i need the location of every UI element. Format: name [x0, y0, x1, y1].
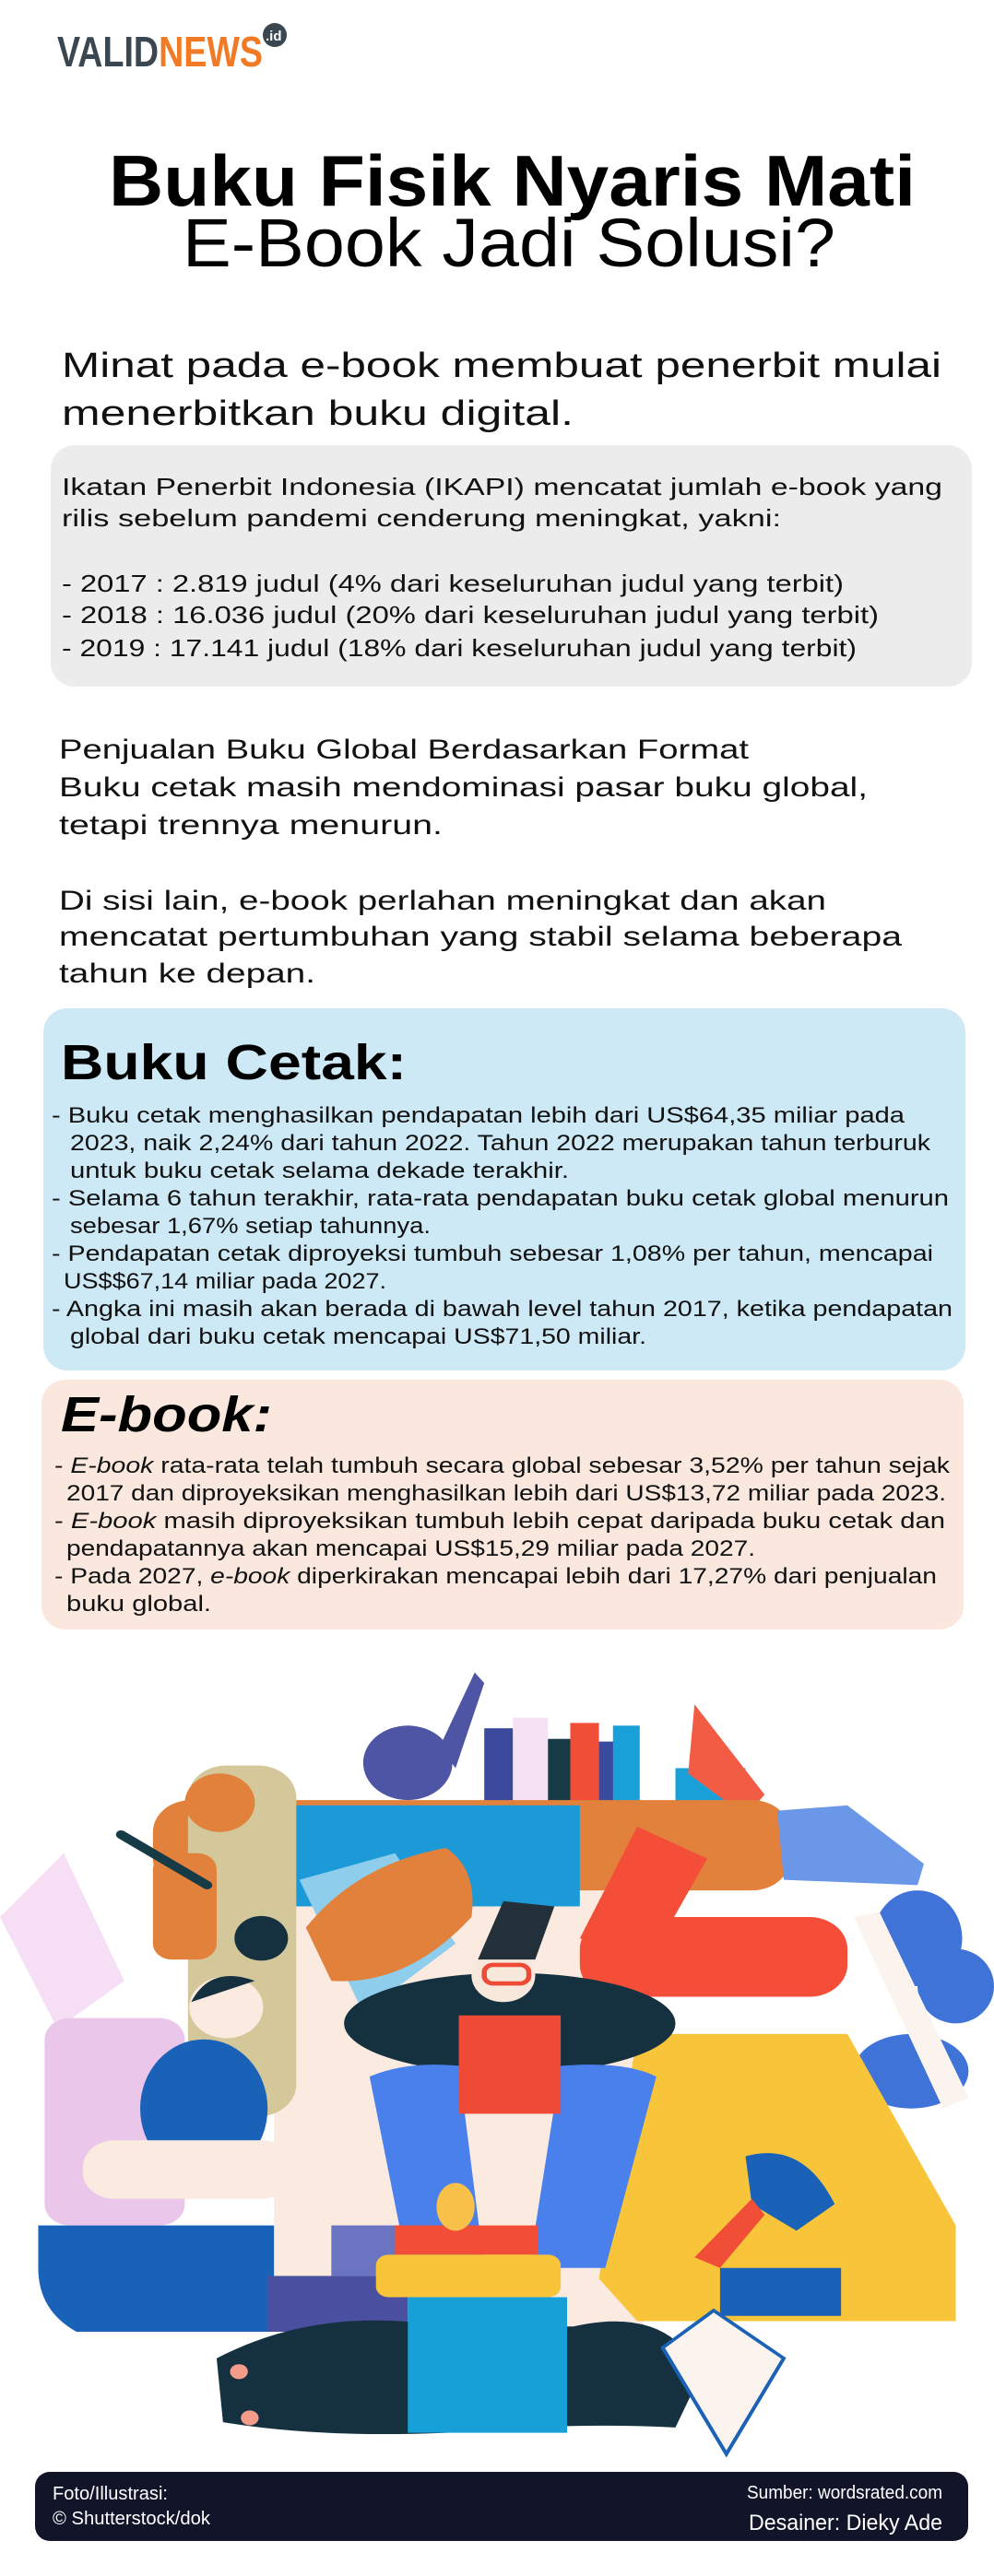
panel: Buku Cetak: - Selama 6 tahun terakhir, rata-rata pendapatan buku cetak global menurun [52, 1186, 949, 1211]
title [109, 140, 916, 281]
panel: Buku Cetak: untuk buku cetak selama dekade terakhir. [70, 1159, 569, 1183]
panel: Buku Cetak: sebesar 1,67% setiap tahunnya. [70, 1214, 431, 1239]
text block: global sales: Penjualan Buku Global Berdasarkan Format [59, 735, 750, 765]
panel: E-book: - Pada 2027, e-book diperkirakan mencapai lebih dari 17,27% dari penjualan [54, 1564, 937, 1589]
panel: Buku Cetak: - Buku cetak menghasilkan pendapatan lebih dari US$64,35 miliar pada [52, 1103, 905, 1128]
footer [35, 2472, 968, 2541]
panel: IKAPI data: - 2019 : 17.141 judul (18% dari keseluruhan judul yang terbit) [62, 634, 857, 662]
subtitle: Minat pada e-book membuat penerbit mulai [62, 347, 941, 385]
subtitle [62, 347, 941, 433]
panel: E-book: - E-book masih diproyeksikan tumbuh lebih cepat daripada buku cetak dan [54, 1509, 945, 1534]
panel: Buku Cetak: global dari buku cetak mencapai US$71,50 miliar. [70, 1324, 646, 1349]
text block: global sales: Di sisi lain, e-book perlahan meningkat dan akan [59, 886, 826, 916]
panel: IKAPI data: - 2017 : 2.819 judul (4% dari keseluruhan judul yang terbit) [62, 570, 844, 597]
text block: global sales: tetapi trennya menurun. [59, 810, 443, 841]
text block: global sales: Buku cetak masih mendominasi pasar buku global, [59, 772, 868, 803]
title: Buku Fisik Nyaris Mati [109, 140, 916, 221]
footer: Foto/Illustrasi: [53, 2484, 168, 2504]
panel: E-book: - E-book rata-rata telah tumbuh secara global sebesar 3,52% per tahun sejak [54, 1453, 951, 1478]
panel: Buku Cetak: US$$67,14 miliar pada 2027. [64, 1269, 386, 1294]
panel: IKAPI data: - 2018 : 16.036 judul (20% dari keseluruhan judul yang terbit) [62, 601, 879, 629]
logo: VALIDNEWS [57, 28, 263, 76]
subtitle: menerbitkan buku digital. [62, 394, 574, 433]
panel: Buku Cetak: - Pendapatan cetak diproyeksi tumbuh sebesar 1,08% per tahun, mencapai [52, 1241, 933, 1266]
standing books [484, 1718, 640, 1814]
footer: Sumber: wordsrated.com [747, 2483, 942, 2503]
illustration: people reading [0, 1672, 994, 2457]
logo: .id [266, 29, 282, 44]
panel: E-book: 2017 dan diproyeksikan menghasilkan lebih dari US$13,72 miliar pada 2023. [66, 1481, 946, 1506]
panel: IKAPI data [51, 445, 972, 687]
heading: Buku Cetak: Buku Cetak: [61, 1035, 407, 1090]
text block: global sales: mencatat pertumbuhan yang stabil selama beberapa [59, 922, 902, 952]
panel: E-book [41, 1380, 964, 1629]
title: E-Book Jadi Solusi? [183, 205, 835, 281]
text block: global sales: tahun ke depan. [59, 959, 315, 989]
heading: E-book: E-book: [61, 1387, 272, 1442]
panel: Buku Cetak: - Angka ini masih akan berada di bawah level tahun 2017, ketika pendapatan [52, 1297, 953, 1322]
panel: Buku Cetak: 2023, naik 2,24% dari tahun 2022. Tahun 2022 merupakan tahun terburuk [70, 1131, 931, 1156]
text block: global sales [59, 735, 902, 989]
panel: Buku Cetak [43, 1008, 965, 1370]
footer: © Shutterstock/dok [53, 2509, 211, 2529]
panel: E-book: buku global. [66, 1592, 211, 1617]
footer: Desainer: Dieky Ade [749, 2511, 942, 2535]
panel: E-book: pendapatannya akan mencapai US$15,29 miliar pada 2027. [66, 1536, 755, 1561]
panel: IKAPI data: rilis sebelum pandemi cenderung meningkat, yakni: [62, 504, 781, 532]
panel: IKAPI data: Ikatan Penerbit Indonesia (IKAPI) mencatat jumlah e-book yang [62, 473, 942, 500]
